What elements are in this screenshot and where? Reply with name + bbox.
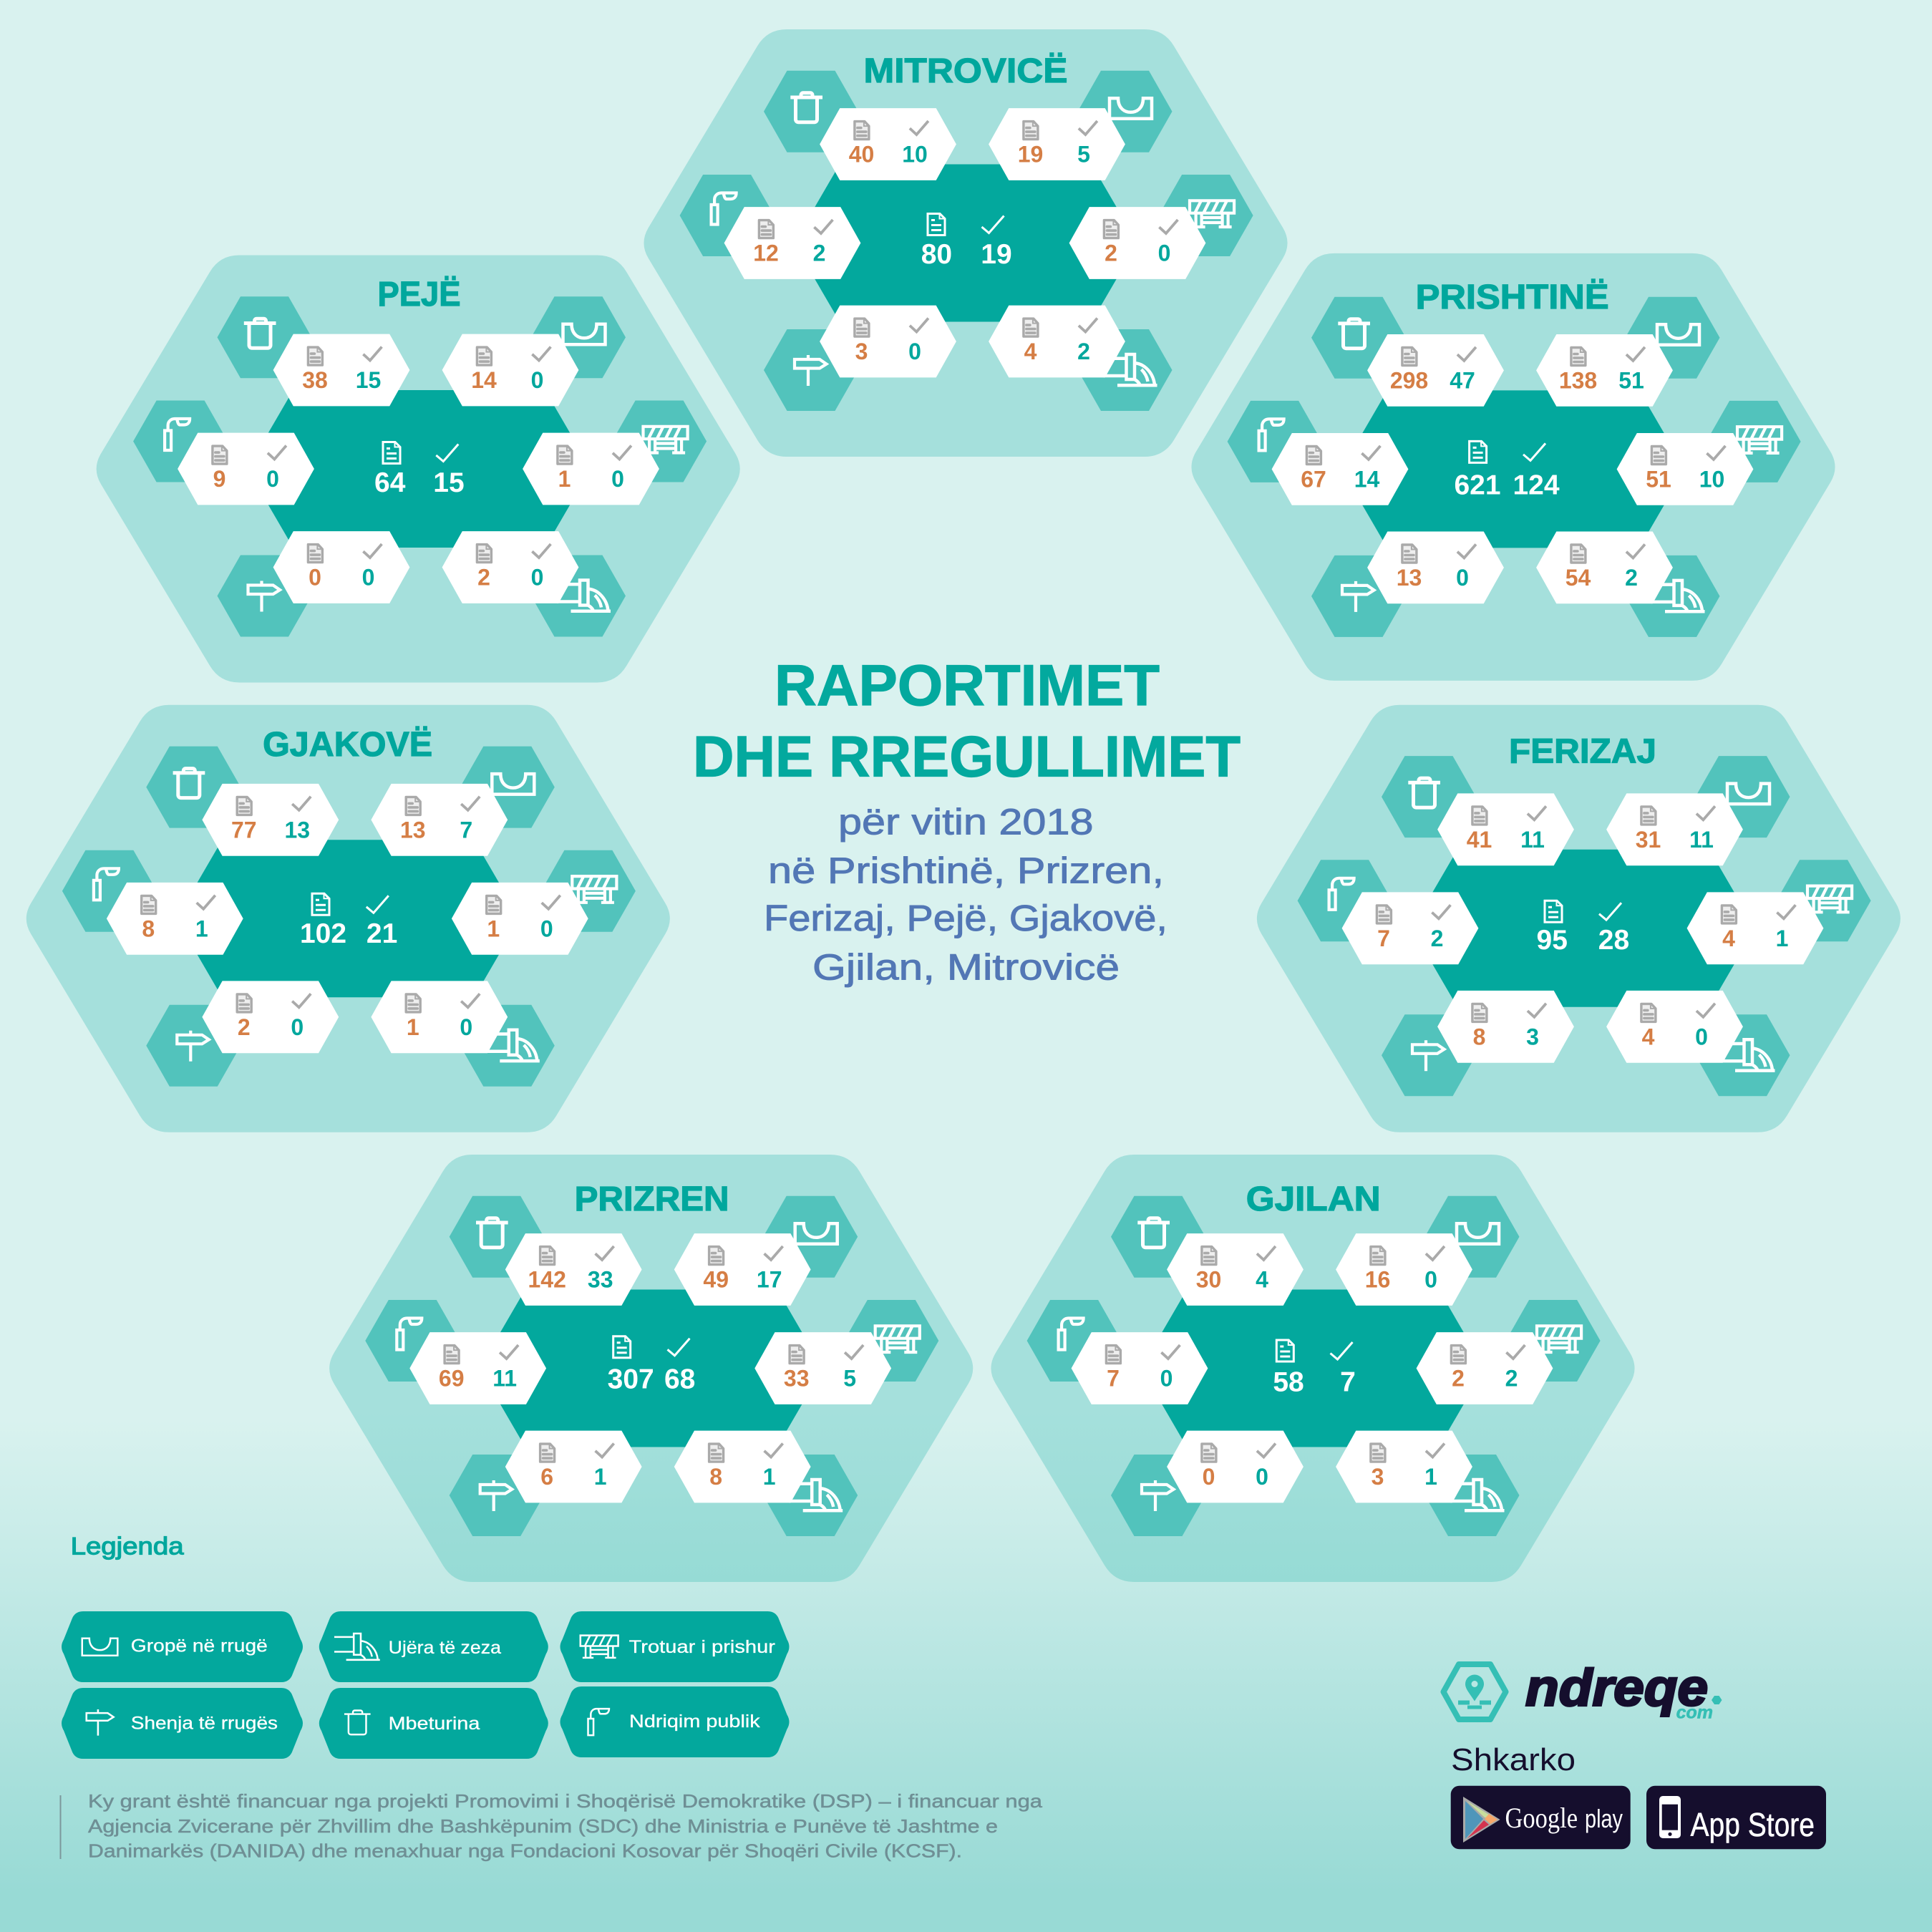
icon: road sign	[764, 329, 858, 411]
footnote: Danimarkës (DANIDA) dhe menaxhuar nga Fondacioni Kosovar për Shoqëri Civile (KCSF).	[88, 1840, 962, 1861]
icon: drain	[1625, 555, 1719, 637]
panel: Pejë	[97, 255, 740, 683]
stat: street lamp: 67	[1301, 466, 1326, 492]
icon: drain	[763, 1455, 858, 1536]
stat: drain: 0	[531, 564, 543, 590]
stat: barrier: 2	[1105, 241, 1117, 266]
icon: barrier	[541, 850, 636, 932]
stat: drain: 1	[407, 1014, 419, 1040]
center totals	[1341, 390, 1685, 548]
stat: street lamp	[1272, 433, 1408, 505]
footnote: Agjencia Zvicerane për Zhvillim dhe Bashkëpunim (SDC) dhe Ministria e Punëve të Jashtme e	[88, 1815, 998, 1837]
legend: street lamp: Ndriqim publik	[629, 1712, 760, 1732]
icon: barrier	[1707, 401, 1801, 482]
stat: drain: 2	[1077, 339, 1090, 364]
stat: trash: 30	[1196, 1267, 1221, 1293]
stat: pothole: 13	[400, 817, 426, 843]
center totals	[1412, 850, 1755, 1007]
stat: drain	[442, 531, 578, 603]
stat: drain	[1606, 991, 1743, 1063]
stat: street lamp: 1	[195, 916, 208, 941]
stat: road sign: 13	[1397, 565, 1422, 591]
stat: street lamp: 14	[1354, 466, 1380, 492]
stat: trash: 11	[1520, 827, 1545, 853]
stat: road sign: 1	[594, 1464, 607, 1490]
stat: pothole	[442, 334, 578, 406]
center totals: 15	[433, 467, 465, 498]
stat: road sign	[820, 306, 956, 377]
legend: trash: Mbeturina	[389, 1714, 480, 1734]
stat: road sign: 0	[362, 564, 374, 590]
icon: pothole	[763, 1196, 858, 1278]
stat: drain: 4	[1024, 339, 1037, 364]
download label: Shkarko	[1451, 1742, 1576, 1777]
icon: barrier	[1159, 175, 1253, 256]
stat: barrier: 51	[1646, 466, 1671, 492]
stat: trash: 15	[356, 367, 381, 393]
stat: street lamp: 0	[266, 466, 279, 492]
legend: road sign	[62, 1688, 303, 1759]
legend: road sign: Shenja të rrugës	[131, 1714, 278, 1734]
panel: Mitrovicë	[644, 29, 1288, 457]
stat: trash: 38	[302, 367, 328, 393]
icon: trash	[1111, 1196, 1205, 1278]
panel backdrop hexagon	[991, 1155, 1635, 1582]
stat: trash: 40	[849, 142, 874, 168]
center totals: 7	[1340, 1367, 1356, 1397]
stat: pothole: 16	[1365, 1267, 1390, 1293]
legend: pothole	[62, 1611, 303, 1682]
stat: street lamp	[409, 1332, 546, 1404]
stat: pothole: 138	[1559, 367, 1597, 393]
stat: barrier: 1	[487, 916, 500, 941]
icon: pothole	[1695, 756, 1790, 838]
stat: road sign	[1367, 531, 1504, 603]
subtitle	[764, 802, 1168, 987]
center totals: 19	[981, 239, 1012, 270]
stat: barrier	[1617, 433, 1753, 505]
stat: trash	[202, 784, 339, 856]
stat: barrier: 0	[611, 466, 624, 492]
stat: trash	[273, 334, 409, 406]
stat: pothole: 17	[757, 1267, 782, 1293]
center totals: 58	[1273, 1367, 1304, 1397]
stat: drain: 54	[1565, 565, 1591, 591]
subtitle: në Prishtinë, Prizren,	[768, 850, 1164, 890]
icon: trash	[450, 1196, 544, 1278]
icon: trash	[764, 71, 858, 152]
stat: trash: 10	[902, 142, 928, 168]
subtitle: Ferizaj, Pejë, Gjakovë,	[764, 898, 1168, 938]
stat: drain	[989, 306, 1125, 377]
icon: drain	[531, 555, 626, 637]
center totals: 80	[921, 239, 952, 270]
icon: road sign	[146, 1005, 241, 1087]
stat: pothole	[1336, 1233, 1472, 1306]
stat: pothole: 5	[1077, 142, 1090, 168]
panel: Ferizaj	[1257, 705, 1901, 1132]
stat: road sign: 0	[291, 1014, 304, 1040]
stat: barrier: 2	[1505, 1366, 1518, 1392]
stat: pothole: 19	[1018, 142, 1043, 168]
center totals: 621	[1454, 470, 1501, 501]
icon: trash	[1311, 297, 1406, 379]
stat: road sign: 0	[1203, 1464, 1215, 1490]
stat: barrier: 2	[1452, 1366, 1465, 1392]
stat: trash	[1167, 1233, 1304, 1306]
center totals: 95	[1537, 925, 1568, 956]
stat: road sign	[202, 981, 339, 1053]
stat: road sign	[273, 531, 409, 603]
icon: road sign	[1382, 1014, 1476, 1096]
stat: drain: 0	[1695, 1024, 1708, 1049]
stat: street lamp	[107, 883, 243, 955]
stat: pothole	[1606, 793, 1743, 865]
stat: trash: 298	[1390, 367, 1428, 393]
stat: road sign: 3	[1526, 1024, 1539, 1049]
title: RAPORTIMET	[775, 654, 1160, 718]
stat: road sign: 3	[855, 339, 868, 364]
icon: pothole	[1424, 1196, 1519, 1278]
heading: FERIZAJ	[1509, 732, 1656, 770]
center totals: 28	[1598, 925, 1629, 956]
stat: drain	[1336, 1431, 1472, 1503]
stat: barrier: 4	[1722, 926, 1735, 951]
panel backdrop hexagon	[26, 705, 670, 1132]
legend: street lamp	[560, 1686, 789, 1757]
icon: pothole	[1625, 297, 1719, 379]
stat: road sign: 0	[1256, 1464, 1268, 1490]
stat: road sign: 0	[1456, 565, 1469, 591]
stat: road sign: 8	[1473, 1024, 1485, 1049]
stat: street lamp: 7	[1377, 926, 1390, 951]
stat: road sign: 6	[540, 1464, 553, 1490]
stat: drain: 0	[460, 1014, 472, 1040]
icon: barrier	[1777, 860, 1871, 941]
title	[693, 654, 1241, 789]
center totals: 307	[608, 1364, 654, 1394]
stat: trash	[1437, 793, 1574, 865]
stat: street lamp: 11	[492, 1366, 517, 1392]
center totals: 64	[374, 467, 406, 498]
panel: Gjilan	[991, 1155, 1635, 1582]
icon: drain	[460, 1005, 555, 1087]
center totals: 68	[664, 1364, 695, 1394]
center totals	[794, 165, 1137, 322]
heading: PRIZREN	[575, 1180, 729, 1218]
panel backdrop hexagon	[97, 255, 740, 683]
badge: App Store	[1646, 1786, 1826, 1849]
legend: trash	[319, 1688, 548, 1759]
heading: GJAKOVË	[263, 726, 432, 764]
icon: drain	[1695, 1014, 1790, 1096]
legend: barrier	[560, 1611, 789, 1682]
stat: pothole	[674, 1233, 811, 1306]
icon: road sign	[1111, 1455, 1205, 1536]
stat: drain: 3	[1372, 1464, 1384, 1490]
icon: street lamp	[365, 1300, 460, 1382]
stat: trash	[820, 108, 956, 180]
icon: barrier	[844, 1300, 938, 1382]
icon: trash	[1382, 756, 1476, 838]
panel backdrop hexagon	[644, 29, 1288, 457]
stat: street lamp: 69	[439, 1366, 464, 1392]
stat: street lamp	[1072, 1332, 1208, 1404]
center totals: 102	[300, 918, 346, 949]
stat: barrier: 1	[558, 466, 571, 492]
stat: trash	[505, 1233, 642, 1306]
icon: pothole	[460, 747, 555, 828]
stat: trash: 142	[528, 1267, 566, 1293]
stat: street lamp: 12	[753, 241, 779, 266]
badge: Google play	[1451, 1786, 1631, 1849]
stat: pothole	[371, 784, 508, 856]
stat: road sign: 0	[908, 339, 921, 364]
stat: pothole: 51	[1618, 367, 1644, 393]
stat: trash	[1367, 334, 1504, 407]
stat: drain: 2	[477, 564, 490, 590]
stat: road sign: 2	[238, 1014, 251, 1040]
stat: road sign	[505, 1431, 642, 1503]
stat: barrier	[523, 433, 659, 505]
stat: trash: 77	[231, 817, 257, 843]
logo: ndreqe	[1443, 1660, 1722, 1723]
panel: Prishtinë	[1191, 253, 1835, 681]
stat: barrier	[754, 1332, 891, 1404]
badge: App Store: App Store	[1691, 1806, 1815, 1843]
icon: street lamp	[1027, 1300, 1122, 1382]
stat: street lamp	[178, 433, 314, 505]
stat: trash: 41	[1467, 827, 1492, 853]
stat: drain: 2	[1625, 565, 1638, 591]
center totals	[1141, 1290, 1485, 1447]
footnote: Ky grant është financuar nga projekti Promovimi i Shoqërisë Demokratike (DSP) – i financuar nga	[88, 1790, 1043, 1812]
heading: PRISHTINË	[1416, 278, 1609, 316]
panel backdrop hexagon	[1191, 253, 1835, 681]
stat: road sign: 0	[309, 564, 321, 590]
stat: drain	[371, 981, 508, 1053]
stat: trash: 4	[1256, 1267, 1268, 1293]
stat: pothole: 0	[531, 367, 543, 393]
stat: pothole: 49	[703, 1267, 729, 1293]
stat: street lamp: 7	[1107, 1366, 1120, 1392]
stat: drain	[674, 1431, 811, 1503]
center totals	[480, 1290, 823, 1447]
icon: pothole	[1078, 71, 1173, 152]
stat: pothole: 7	[460, 817, 472, 843]
stat: pothole: 11	[1689, 827, 1714, 853]
icon: street lamp	[133, 401, 228, 482]
icon: barrier	[1506, 1300, 1601, 1382]
stat: barrier: 0	[540, 916, 553, 941]
stat: drain: 4	[1642, 1024, 1655, 1049]
icon: road sign	[450, 1455, 544, 1536]
icon: street lamp	[62, 850, 157, 932]
heading: MITROVICË	[863, 52, 1068, 90]
panel backdrop hexagon	[329, 1155, 973, 1582]
center totals: 21	[367, 918, 397, 949]
stat: pothole	[1536, 334, 1673, 407]
subtitle: Gjilan, Mitrovicë	[812, 946, 1120, 987]
icon: drain	[1424, 1455, 1519, 1536]
stat: road sign	[1437, 991, 1574, 1063]
icon: barrier	[612, 401, 707, 482]
stat: trash: 47	[1450, 367, 1475, 393]
stat: street lamp	[1342, 892, 1478, 964]
subtitle: për vitin 2018	[838, 802, 1094, 843]
icon: logo hexagon with pin	[1443, 1664, 1506, 1719]
heading: PEJË	[378, 276, 461, 314]
icon: trash	[218, 296, 312, 378]
logo: ndreqe: com	[1676, 1703, 1713, 1723]
icon: trash	[146, 747, 241, 828]
icon: street lamp	[1298, 860, 1392, 941]
icon: street lamp	[680, 175, 775, 256]
panel: Gjakovë	[26, 705, 670, 1132]
stat: street lamp: 8	[142, 916, 155, 941]
legend: barrier: Trotuar i prishur	[629, 1637, 775, 1657]
icon: road sign	[218, 555, 312, 637]
stat: pothole: 14	[471, 367, 497, 393]
legend: drain	[319, 1611, 548, 1682]
stat: road sign	[1167, 1431, 1304, 1503]
stat: barrier: 10	[1699, 466, 1724, 492]
stat: street lamp: 2	[1431, 926, 1443, 951]
stat: street lamp: 9	[213, 466, 225, 492]
stat: pothole: 0	[1424, 1267, 1437, 1293]
title: DHE RREGULLIMET	[693, 724, 1241, 789]
stat: barrier	[1687, 892, 1823, 964]
icon: road sign	[1311, 555, 1406, 637]
icon: drain	[1078, 329, 1173, 411]
legend: pothole: Gropë në rrugë	[131, 1636, 268, 1656]
footnote	[60, 1790, 1043, 1861]
heading: GJILAN	[1246, 1180, 1381, 1218]
badge: Google play: Google	[1505, 1802, 1578, 1834]
stat: barrier	[452, 883, 588, 955]
stat: street lamp: 2	[813, 241, 825, 266]
stat: drain	[1536, 531, 1673, 603]
stat: barrier: 1	[1776, 926, 1788, 951]
stat: barrier: 33	[784, 1366, 809, 1392]
stat: barrier: 0	[1158, 241, 1170, 266]
center totals: 124	[1513, 470, 1560, 501]
stat: street lamp: 0	[1160, 1366, 1173, 1392]
stat: drain: 1	[763, 1464, 776, 1490]
stat: trash: 13	[285, 817, 310, 843]
center totals	[248, 390, 591, 548]
stat: street lamp	[724, 207, 860, 279]
icon: street lamp	[1228, 401, 1322, 482]
legend: drain: Ujëra të zeza	[389, 1638, 501, 1658]
icon: pothole	[531, 296, 626, 378]
legend heading: Legjenda	[71, 1533, 184, 1560]
stat: drain: 1	[1424, 1464, 1437, 1490]
stat: pothole	[989, 108, 1125, 180]
stat: pothole: 31	[1636, 827, 1661, 853]
stat: barrier	[1069, 207, 1205, 279]
badge: Google play: play	[1585, 1804, 1623, 1833]
logo: ndreqe: ndreqe	[1525, 1660, 1708, 1717]
panel: Prizren	[329, 1155, 973, 1582]
stat: barrier: 5	[843, 1366, 856, 1392]
stat: barrier	[1417, 1332, 1553, 1404]
panel backdrop hexagon	[1257, 705, 1901, 1132]
stat: drain: 8	[709, 1464, 722, 1490]
center totals	[176, 840, 520, 997]
stat: trash: 33	[588, 1267, 613, 1293]
